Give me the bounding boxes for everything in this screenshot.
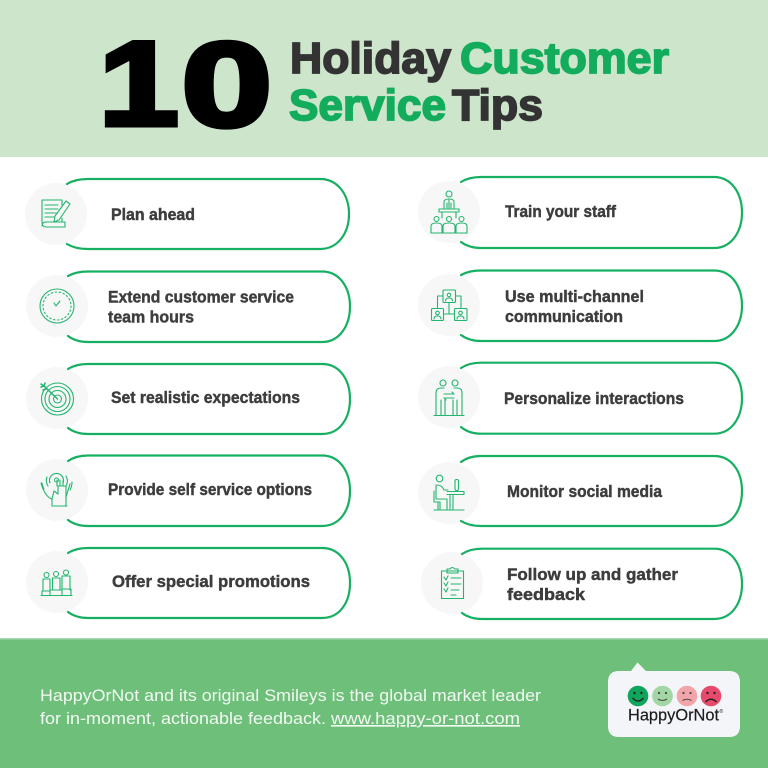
smiley: very unhappy xyxy=(701,686,721,706)
panel: special promotions xyxy=(26,548,350,618)
panel: follow up: Follow up and gather xyxy=(507,565,678,584)
panel: realistic expectations xyxy=(26,364,350,434)
smiley: happy xyxy=(652,686,673,706)
panel: social media xyxy=(418,456,742,526)
icon: connected contacts xyxy=(432,290,467,320)
smiley: very happy xyxy=(628,686,648,706)
panel: train staff xyxy=(418,177,742,248)
panel: personalize: Personalize interactions xyxy=(504,389,684,408)
logo wordmark: HappyOrNot xyxy=(628,706,719,724)
title: Tips xyxy=(452,81,543,130)
icon: people on podiums xyxy=(41,570,72,596)
big number 10: 0 xyxy=(182,18,272,152)
big number 10: 1 xyxy=(99,17,179,151)
panel: train staff: Train your staff xyxy=(505,202,616,221)
panel: realistic expectations: Set realistic expectations xyxy=(111,388,300,407)
icon: document and pencil xyxy=(42,200,70,227)
panel: multi-channel: Use multi-channel xyxy=(505,287,644,306)
panel: plan ahead xyxy=(25,179,349,249)
icon: trainer and audience xyxy=(431,191,467,233)
icon: hand with touch rings xyxy=(41,473,72,506)
icon: clipboard checklist xyxy=(442,568,464,598)
icon: clock xyxy=(40,289,74,323)
panel: personalize xyxy=(418,363,742,434)
title: Holiday xyxy=(290,34,452,83)
icon: two people exchanging xyxy=(434,380,464,416)
footer text: www.happy-or-not.com xyxy=(330,710,520,728)
big number 10 xyxy=(99,17,272,152)
title xyxy=(289,34,669,130)
panel: multi-channel xyxy=(418,270,742,341)
smiley: unhappy xyxy=(677,686,697,706)
title: Customer xyxy=(460,34,669,83)
panel: self service: Provide self service options xyxy=(108,480,312,499)
header band xyxy=(0,0,768,157)
icon: person at desk xyxy=(434,475,464,510)
logo: HappyOrNot bubble xyxy=(608,662,740,737)
panel: social media: Monitor social media xyxy=(507,482,662,501)
panel: plan ahead: Plan ahead xyxy=(111,205,195,224)
panel: extend hours: Extend customer service xyxy=(108,288,294,306)
panel: extend hours: team hours xyxy=(108,308,194,326)
footer text xyxy=(40,687,542,728)
panel: multi-channel: communication xyxy=(505,307,623,326)
footer text: for in-moment, actionable feedback. xyxy=(40,710,326,728)
panel: special promotions: Offer special promotions xyxy=(112,572,310,591)
panel: follow up: feedback xyxy=(507,585,586,604)
registered mark: ® xyxy=(720,708,724,715)
footer text: HappyOrNot and its original Smileys is the global market leader xyxy=(40,687,542,705)
footer band xyxy=(0,638,768,768)
title: Service xyxy=(289,81,446,130)
panel: self service xyxy=(26,456,350,526)
icon: target xyxy=(41,383,74,415)
panel: follow up xyxy=(421,549,742,619)
panel: extend hours xyxy=(26,272,350,342)
